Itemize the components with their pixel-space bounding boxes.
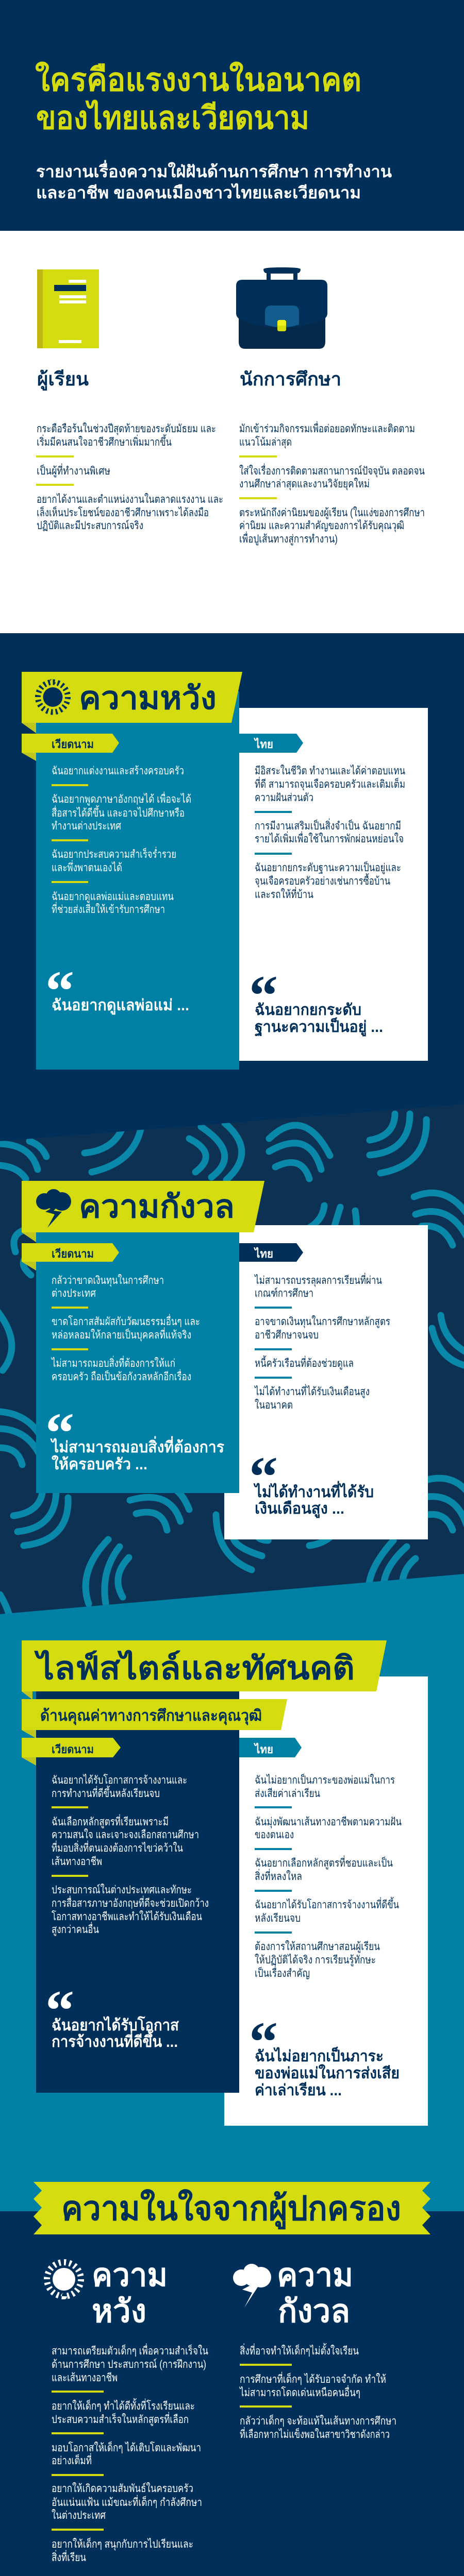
Vietnam lifestyle text: เส้นทางอาชีพ bbox=[52, 1856, 102, 1868]
learner points: เล็งเห็นประโยชน์ของอาชีวศึกษาเพราะได้ลงมือ bbox=[37, 505, 209, 519]
Vietnam hopes text: สื่อสารได้ดีขึ้น และอาจไปศึกษาหรือ bbox=[52, 805, 185, 819]
quote: Thailand worry: ไม่ได้ทำงานที่ได้รับ bbox=[253, 1481, 374, 1501]
Thailand hopes text: รายได้เพิ่มเพื่อใช้ในการพักผ่อนหย่อนใจ bbox=[255, 831, 404, 845]
quote: Vietnam hope: “ bbox=[45, 959, 74, 1022]
Vietnam worries text: ไม่สามารถมอบสิ่งที่ต้องการให้แก่ bbox=[51, 1355, 175, 1369]
Vietnam lifestyle text: การสื่อสารภาษาอังกฤษที่ดีจะช่วยเปิดกว้าง bbox=[52, 1895, 209, 1909]
Vietnam hopes text: ฉันอยากดูแลพ่อแม่และตอบแทน bbox=[52, 891, 174, 903]
educator points: มักเข้าร่วมกิจกรรมเพื่อต่อยอดทักษะและติดตาม bbox=[239, 421, 415, 435]
parents hopes text: ในต่างประเทศ bbox=[52, 2509, 106, 2521]
Thailand lifestyle text bbox=[255, 1773, 402, 1979]
panel: learners bbox=[36, 269, 223, 532]
educator points: ค่านิยม และความสำคัญของการได้รับคุณวุฒิ bbox=[239, 519, 404, 532]
quote: Thailand lifestyle bbox=[249, 2010, 400, 2099]
section background: navy bbox=[0, 633, 464, 1148]
educator points: แนวโน้มล่าสุด bbox=[239, 436, 292, 449]
parents worries text bbox=[239, 2343, 396, 2441]
parents hopes text: สามารถเตรียมตัวเด็กๆ เพื่อความสำเร็จใน bbox=[52, 2343, 208, 2357]
quote: Vietnam lifestyle bbox=[45, 1979, 179, 2050]
quote: Thailand hope bbox=[249, 964, 383, 1037]
Vietnam lifestyle text: ฉันเลือกหลักสูตรที่เรียนเพราะมี bbox=[52, 1814, 169, 1828]
Vietnam worries text bbox=[51, 1274, 200, 1383]
Thailand hopes text bbox=[255, 765, 405, 901]
panel: lifestyle and attitudes bbox=[22, 1640, 428, 2126]
quote: Vietnam hope bbox=[45, 959, 189, 1022]
tab: Vietnam: เวียดนาม bbox=[52, 1743, 94, 1756]
heading: educators: นักการศึกษา bbox=[240, 368, 341, 389]
Vietnam hopes text: ฉันอยากแต่งงานและสร้างครอบครัว bbox=[52, 765, 184, 777]
Vietnam worries text: ต่างประเทศ bbox=[52, 1287, 96, 1299]
quote: Thailand worry: “ bbox=[249, 1445, 278, 1508]
heading: worries: ความกังวล bbox=[79, 1189, 235, 1225]
tab: Vietnam bbox=[22, 1243, 119, 1270]
learner points: อยากได้งานและตำแหน่งงานในตลาดแรงงาน และ bbox=[37, 493, 223, 505]
icon: white sun bbox=[47, 2262, 81, 2296]
quote: Thailand hope: ฐานะความเป็นอยู่ ... bbox=[255, 1017, 383, 1037]
quote: Vietnam hope: ฉันอยากดูแลพ่อแม่ ... bbox=[52, 997, 189, 1015]
Thailand worries text bbox=[254, 1273, 390, 1411]
educator points: งานศึกษาล่าสุดและงานวิจัยยุคใหม่ bbox=[239, 478, 370, 490]
section background: navy cover bbox=[0, 633, 464, 1141]
Thailand lifestyle text: ฉันมุ่งพัฒนาเส้นทางอาชีพตามความฝัน bbox=[255, 1816, 402, 1828]
parents worries text: กลัวว่าเด็กๆ จะท้อแท้ในเส้นทางการศึกษา bbox=[240, 2414, 396, 2427]
Thailand worries text: ไม่ได้ทำงานที่ได้รับเงินเดือนสูง bbox=[254, 1384, 370, 1398]
Thailand hopes text: และรถให้ที่บ้าน bbox=[255, 887, 313, 901]
tab: Vietnam bbox=[22, 1738, 121, 1766]
Thailand hopes text: ฉันอยากยกระดับฐานะความเป็นอยู่และ bbox=[255, 860, 401, 874]
parents hopes text: สิ่งที่เรียน bbox=[52, 2550, 86, 2564]
ribbon: parents heading: ความในใจจากผู้ปกครอง bbox=[61, 2188, 401, 2230]
parents hopes text: อย่างเต็มที่ bbox=[52, 2453, 92, 2467]
parents worries text: ที่เลือกหากไม่แข็งพอในสาขาวิชาดังกล่าว bbox=[240, 2427, 390, 2441]
banner: worries bbox=[22, 1181, 264, 1242]
parents hopes text: และเส้นทางอาชีพ bbox=[52, 2372, 118, 2384]
banner: hope bbox=[22, 672, 242, 733]
Vietnam hopes text: และพึ่งพาตนเองได้ bbox=[52, 860, 122, 874]
Thailand lifestyle text: ฉันอยากได้รับโอกาสการจ้างงานที่ดีขึ้น bbox=[255, 1897, 399, 1911]
subtitle: และอาชีพ ของคนเมืองชาวไทยและเวียดนาม bbox=[36, 183, 361, 202]
banner: lifestyle: ไลฟ์สไตล์และทัศนคติ bbox=[34, 1650, 355, 1686]
Vietnam worries text: ขาดโอกาสสัมผัสกับวัฒนธรรมอื่นๆ และ bbox=[52, 1314, 200, 1328]
educator points: ตระหนักถึงค่านิยมของผู้เรียน (ในแง่ของการศึกษา bbox=[239, 506, 425, 519]
heading: parents worries: กังวล bbox=[278, 2294, 350, 2329]
quote: Thailand hope: ฉันอยากยกระดับ bbox=[255, 1002, 361, 1019]
quote: Vietnam lifestyle: ฉันอยากได้รับโอกาส bbox=[52, 2015, 179, 2034]
panel: worries bbox=[22, 1181, 428, 1539]
sub-banner: education values bbox=[22, 1699, 287, 1738]
parents hopes text: อยากให้เด็กๆ ทำได้ดีทั้งที่โรงเรียนและ bbox=[52, 2398, 195, 2412]
quote: Vietnam lifestyle: “ bbox=[45, 1979, 74, 2042]
Thailand worries text: อาชีวศึกษาจนจบ bbox=[255, 1329, 319, 1341]
tab: Thailand bbox=[239, 734, 303, 753]
Vietnam lifestyle text: ฉันอยากได้รับโอกาสการจ้างงานและ bbox=[52, 1774, 187, 1786]
icon: storm cloud bbox=[36, 1189, 71, 1228]
quote: Thailand lifestyle: ของพ่อแม่ในการส่งเสีย bbox=[255, 2064, 400, 2082]
parents hopes text: อยากให้เกิดความสัมพันธ์ในครอบครัว bbox=[52, 2482, 193, 2495]
title: ของไทยและเวียดนาม bbox=[36, 99, 309, 136]
title bbox=[35, 61, 361, 136]
Thailand worries text: ในอนาคต bbox=[255, 1399, 293, 1411]
heading: parents hopes: หวัง bbox=[92, 2294, 146, 2329]
educator points: เพื่อปูเส้นทางสู่การทำงาน) bbox=[239, 531, 338, 546]
parents hopes text: ด้านการศึกษา ประสบการณ์ (การฝึกงาน) bbox=[52, 2358, 206, 2370]
subtitle bbox=[36, 160, 392, 202]
Thailand lifestyle text: ส่งเสียค่าเล่าเรียน bbox=[255, 1788, 320, 1800]
heading: parents hopes: ความ bbox=[92, 2258, 168, 2293]
Thailand hopes text: การมีงานเสริมเป็นสิ่งจำเป็น ฉันอยากมี bbox=[255, 818, 401, 832]
tab: Thailand: ไทย bbox=[254, 1742, 273, 1756]
quote: Vietnam lifestyle: การจ้างงานที่ดีขึ้น ... bbox=[52, 2030, 178, 2050]
educator points: ใส่ใจเรื่องการติดตามสถานการณ์ปัจจุบัน ตลอดจน bbox=[239, 463, 425, 478]
ribbon: parents heading bbox=[34, 2182, 430, 2234]
icon: sun bbox=[38, 682, 68, 712]
panel: hope Vietnam bbox=[36, 691, 239, 1070]
learner points: กระตือรือร้นในช่วงปีสุดท้ายของระดับมัธยม และ bbox=[37, 422, 216, 435]
quote: Vietnam worry: “ bbox=[45, 1401, 74, 1464]
Vietnam hopes text: ทำงานต่างประเทศ bbox=[52, 820, 122, 832]
Thailand lifestyle text: ให้ปฏิบัติได้จริง การเรียนรู้ทักษะ bbox=[255, 1954, 376, 1967]
parents worries text: สิ่งที่อาจทำให้เด็กๆไม่ตั้งใจเรียน bbox=[240, 2343, 359, 2357]
icon: book bbox=[37, 269, 99, 348]
Thailand lifestyle text: ฉันไม่อยากเป็นภาระของพ่อแม่ในการ bbox=[255, 1773, 395, 1786]
Vietnam hopes text: ฉันอยากประสบความสำเร็จร่ำรวย bbox=[52, 846, 176, 860]
quote: Vietnam worry bbox=[45, 1401, 224, 1473]
icon: white storm cloud bbox=[233, 2264, 271, 2308]
subtitle: รายงานเรื่องความใฝ่ฝันด้านการศึกษา การทำงาน bbox=[36, 160, 392, 181]
Thailand lifestyle text: เป็นเรื่องสำคัญ bbox=[255, 1965, 310, 1979]
Thailand worries text: หนี้ครัวเรือนที่ต้องช่วยดูแล bbox=[255, 1355, 354, 1370]
Vietnam lifestyle text: สูงกว่าคนอื่น bbox=[52, 1922, 99, 1936]
Vietnam worries text: หล่อหลอมให้กลายเป็นบุคคลที่แท้จริง bbox=[52, 1327, 191, 1342]
tab: Thailand: ไทย bbox=[254, 1247, 273, 1260]
Vietnam lifestyle text: ที่มอบสิ่งที่ตนเองต้องการไขว่คว้าใน bbox=[52, 1840, 183, 1854]
sub-banner: education values: ด้านคุณค่าทางการศึกษาและคุณวุฒิ bbox=[40, 1707, 262, 1725]
heading: parents hopes bbox=[92, 2258, 168, 2329]
header panel bbox=[0, 0, 464, 231]
Vietnam worries text: กลัวว่าขาดเงินทุนในการศึกษา bbox=[52, 1274, 164, 1287]
parents hopes text: อยากให้เด็กๆ สนุกกับการไปเรียนและ bbox=[52, 2537, 193, 2551]
Thailand lifestyle text: ฉันอยากเลือกหลักสูตรที่ชอบและเป็น bbox=[255, 1855, 393, 1870]
quote: Vietnam worry: ไม่สามารถมอบสิ่งที่ต้องการ bbox=[50, 1436, 224, 1456]
Thailand hopes text: ความฝันส่วนตัว bbox=[255, 792, 313, 804]
Thailand worries text: ไม่สามารถบรรลุผลการเรียนที่ผ่าน bbox=[254, 1273, 382, 1287]
heading: hope: ความหวัง bbox=[79, 681, 217, 716]
Vietnam lifestyle text: ความสนใจ และเจาะจงเลือกสถานศึกษา bbox=[52, 1828, 199, 1841]
Thailand lifestyle text: ของตนเอง bbox=[255, 1829, 294, 1841]
quote: Thailand worry: เงินเดือนสูง ... bbox=[255, 1500, 344, 1518]
Thailand lifestyle text: สิ่งที่หลงใหล bbox=[255, 1869, 302, 1883]
parents hopes text bbox=[52, 2343, 208, 2564]
tab: Vietnam: เวียดนาม bbox=[52, 1247, 94, 1260]
Vietnam lifestyle text: ประสบการณ์ในต่างประเทศและทักษะ bbox=[52, 1884, 192, 1896]
quote: Thailand lifestyle: “ bbox=[249, 2010, 278, 2073]
parents hopes text: มอบโอกาสให้เด็กๆ ได้เติบโตและพัฒนา bbox=[52, 2441, 201, 2454]
section background: teal bbox=[0, 1574, 464, 2211]
panel: hope Thailand bbox=[239, 708, 428, 1061]
panel: lifestyle Vietnam bbox=[36, 1691, 239, 2093]
learner points: เริ่มมีคนสนใจอาชีวศึกษาเพิ่มมากขึ้น bbox=[37, 434, 172, 448]
Thailand hopes text: จุนเจือครอบครัวอย่างเช่นการซื้อบ้าน bbox=[255, 873, 390, 888]
Vietnam hopes text: ที่ช่วยส่งเสียให้เข้ารับการศึกษา bbox=[52, 902, 165, 916]
quote: Thailand worry bbox=[249, 1445, 374, 1518]
Vietnam lifestyle text bbox=[52, 1774, 209, 1936]
tab: Thailand bbox=[239, 1738, 302, 1757]
Thailand lifestyle text: หลังเรียนจบ bbox=[255, 1912, 301, 1924]
Thailand lifestyle text: ต้องการให้สถานศึกษาสอนผู้เรียน bbox=[255, 1940, 380, 1953]
parents hopes text: อันแน่นแฟ้น แม้ขณะที่เด็กๆ กำลังศึกษา bbox=[52, 2495, 202, 2509]
learner points: เป็นผู้ที่ทำงานพิเศษ bbox=[37, 463, 110, 478]
Vietnam hopes text bbox=[52, 765, 191, 916]
quote: Thailand hope: “ bbox=[249, 964, 278, 1027]
panel: lifestyle Thailand bbox=[224, 1676, 428, 2126]
quote: Thailand lifestyle: ฉันไม่อยากเป็นภาระ bbox=[255, 2046, 384, 2065]
Vietnam lifestyle text: โอกาสทางอาชีพและทำให้ได้รับเงินเดือน bbox=[52, 1910, 202, 1923]
educator points bbox=[239, 421, 425, 546]
section background: worries texture bbox=[0, 1104, 464, 1618]
Thailand hopes text: ที่ดี สามารถจุนเจือครอบครัวและเติมเต็ม bbox=[255, 776, 405, 791]
learner points: ปฏิบัติและมีประสบการณ์จริง bbox=[37, 519, 143, 532]
quote: Vietnam worry: ให้ครอบครัว ... bbox=[52, 1455, 147, 1473]
Thailand worries text: เกณฑ์การศึกษา bbox=[255, 1287, 313, 1299]
panel: hope bbox=[22, 672, 428, 1070]
banner: lifestyle bbox=[22, 1640, 387, 1700]
parents worries text: การศึกษาที่เด็กๆ ได้รับอาจจำกัด ทำให้ bbox=[240, 2371, 386, 2385]
pattern: swirls bbox=[0, 1114, 464, 1615]
Thailand worries text: อาจขาดเงินทุนในการศึกษาหลักสูตร bbox=[255, 1315, 390, 1328]
Vietnam worries text: ครอบครัว ถือเป็นข้อกังวลหลักอีกเรื่อง bbox=[52, 1369, 191, 1383]
tab: Thailand bbox=[239, 1243, 303, 1262]
panel: worries Thailand bbox=[224, 1225, 428, 1539]
icon: briefcase bbox=[236, 267, 327, 349]
tab: Vietnam: เวียดนาม bbox=[52, 738, 94, 751]
title: ใครคือแรงงานในอนาคต bbox=[35, 61, 361, 98]
Thailand hopes text: มีอิสระในชีวิต ทำงานและได้ค่าตอบแทน bbox=[255, 765, 405, 777]
panel: educators bbox=[236, 267, 425, 546]
Vietnam lifestyle text: การทำงานที่ดีขึ้นหลังเรียนจบ bbox=[52, 1786, 160, 1800]
heading: parents worries: ความ bbox=[277, 2258, 353, 2293]
parents worries text: ไม่สามารถโดดเด่นเหนือคนอื่นๆ bbox=[239, 2385, 360, 2399]
tab: Vietnam bbox=[22, 734, 119, 761]
panel: parents bbox=[0, 2182, 464, 2576]
tab: Thailand: ไทย bbox=[254, 737, 273, 751]
heading: learners: ผู้เรียน bbox=[37, 368, 89, 391]
heading: parents worries bbox=[277, 2258, 353, 2329]
learner points bbox=[36, 422, 223, 532]
quote: Thailand lifestyle: ค่าเล่าเรียน ... bbox=[255, 2082, 342, 2099]
parents hopes text: ประสบความสำเร็จในหลักสูตรที่เลือก bbox=[52, 2412, 189, 2426]
Vietnam hopes text: ฉันอยากพูดภาษาอังกฤษได้ เพื่อจะได้ bbox=[52, 791, 191, 806]
panel: worries Vietnam bbox=[36, 1226, 239, 1493]
